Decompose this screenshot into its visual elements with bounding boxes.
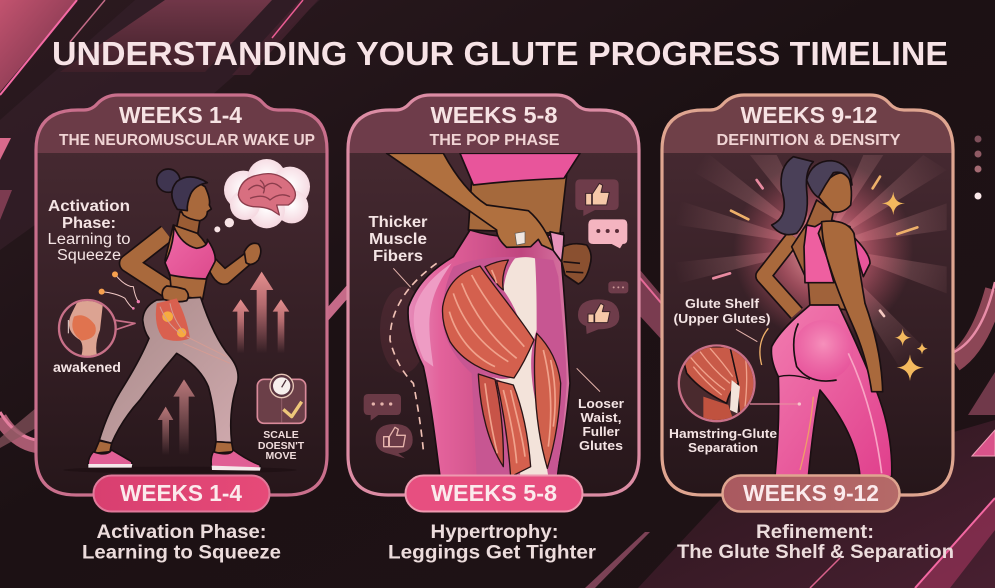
- label: looser waist: Fuller: [582, 424, 620, 439]
- label: glute shelf: [674, 296, 770, 326]
- dashed contour: [390, 263, 437, 450]
- label: hamstring-glute separation: Separation: [688, 440, 758, 455]
- pill: weeks 9-12: [722, 476, 900, 512]
- label: looser waist: Waist,: [580, 410, 622, 425]
- panel: weeks 5-8: [348, 95, 639, 564]
- label: activation phase: Activation: [48, 198, 130, 215]
- caption: activation phase: Learning to Squeeze: [82, 542, 281, 564]
- scale icon: [257, 374, 306, 423]
- caption: refinement: Refinement:: [756, 521, 874, 543]
- caption: hypertrophy: Hypertrophy:: [430, 521, 558, 543]
- label: scale doesn't move: SCALE: [263, 429, 299, 441]
- figure: [763, 157, 892, 477]
- sparkles: [882, 192, 928, 381]
- pointer lines: [736, 328, 801, 406]
- label: hamstring-glute separation: [669, 426, 777, 455]
- muscles: [442, 257, 567, 477]
- pill: weeks 1-4: [94, 476, 270, 512]
- woman figure: [88, 169, 261, 469]
- panel background: [662, 95, 953, 495]
- label: thicker muscle fibers: Thicker: [368, 214, 428, 231]
- panel border: [662, 95, 953, 495]
- header band: [36, 95, 327, 153]
- label: scale doesn't move: DOESN'T: [258, 440, 305, 452]
- label: looser waist: Glutes: [579, 438, 623, 453]
- panel border: [36, 95, 327, 495]
- subheading: THE POP PHASE: [430, 132, 560, 149]
- muscle fibers: [449, 270, 555, 463]
- label: glute shelf: (Upper Glutes): [674, 311, 770, 326]
- muscle inset: [59, 300, 135, 360]
- activated muscle: [156, 298, 230, 363]
- thought bubble with brain: [214, 159, 310, 232]
- panel background: [36, 95, 327, 495]
- panel background: [348, 95, 639, 495]
- caption: hypertrophy: Leggings Get Tighter: [388, 542, 596, 564]
- arrows: [158, 272, 289, 455]
- label: scale doesn't move: MOVE: [266, 450, 296, 462]
- caption: hypertrophy: [388, 521, 596, 564]
- caption: activation phase: [82, 521, 281, 564]
- leggings: [408, 230, 570, 477]
- caption: refinement: [677, 521, 954, 563]
- label: activation phase: Learning to: [48, 231, 130, 248]
- panel border: [348, 95, 639, 495]
- illustration: glute anatomy: [364, 153, 628, 477]
- label: hamstring-glute separation: Hamstring-Glute: [669, 426, 777, 441]
- subheading: THE NEUROMUSCULAR WAKE UP: [59, 132, 315, 149]
- subheading: DEFINITION & DENSITY: [716, 132, 901, 149]
- label: activation phase: Phase:: [62, 215, 116, 232]
- heading: weeks 1-4: WEEKS 1-4: [119, 102, 242, 128]
- energy sparks: [99, 271, 140, 310]
- sunburst rays: [689, 155, 946, 361]
- spark accents: [713, 177, 917, 316]
- pill: weeks 5-8: WEEKS 5-8: [431, 480, 557, 506]
- pill: weeks 5-8: [406, 476, 582, 512]
- label: scale doesn't move: [258, 429, 305, 462]
- panel: weeks 9-12: [662, 95, 954, 563]
- label: activation phase: [48, 198, 130, 264]
- label: looser waist: [578, 396, 624, 453]
- heading: weeks 9-12: WEEKS 9-12: [740, 102, 878, 128]
- label: thicker muscle fibers: Muscle: [369, 231, 427, 248]
- label: looser waist: Looser: [578, 396, 624, 411]
- label: glute shelf: Glute Shelf: [685, 296, 760, 311]
- title: UNDERSTANDING YOUR GLUTE PROGRESS TIMELINE: [52, 36, 948, 73]
- pill: weeks 9-12: WEEKS 9-12: [743, 480, 879, 506]
- label: thicker muscle fibers: Fibers: [373, 248, 423, 265]
- header band: [662, 95, 953, 153]
- panel: weeks 1-4: [36, 95, 327, 564]
- muscle inset: [679, 346, 757, 421]
- heading: weeks 5-8: WEEKS 5-8: [430, 102, 558, 128]
- label: activation phase: Squeeze: [57, 247, 121, 264]
- caption: refinement: The Glute Shelf & Separation: [677, 541, 954, 563]
- pointer lines: [393, 268, 600, 392]
- illustration: walking woman: [59, 159, 310, 473]
- arm and hand: [387, 153, 591, 284]
- illustration: back view woman: [667, 155, 947, 477]
- pill: weeks 1-4: WEEKS 1-4: [120, 480, 242, 506]
- midriff and top: [460, 153, 580, 233]
- header band: [348, 95, 639, 153]
- label: thicker muscle fibers: [368, 214, 428, 265]
- label: awakened: awakened: [53, 360, 121, 375]
- caption: activation phase: Activation Phase:: [96, 521, 266, 543]
- feedback icons: [364, 179, 628, 458]
